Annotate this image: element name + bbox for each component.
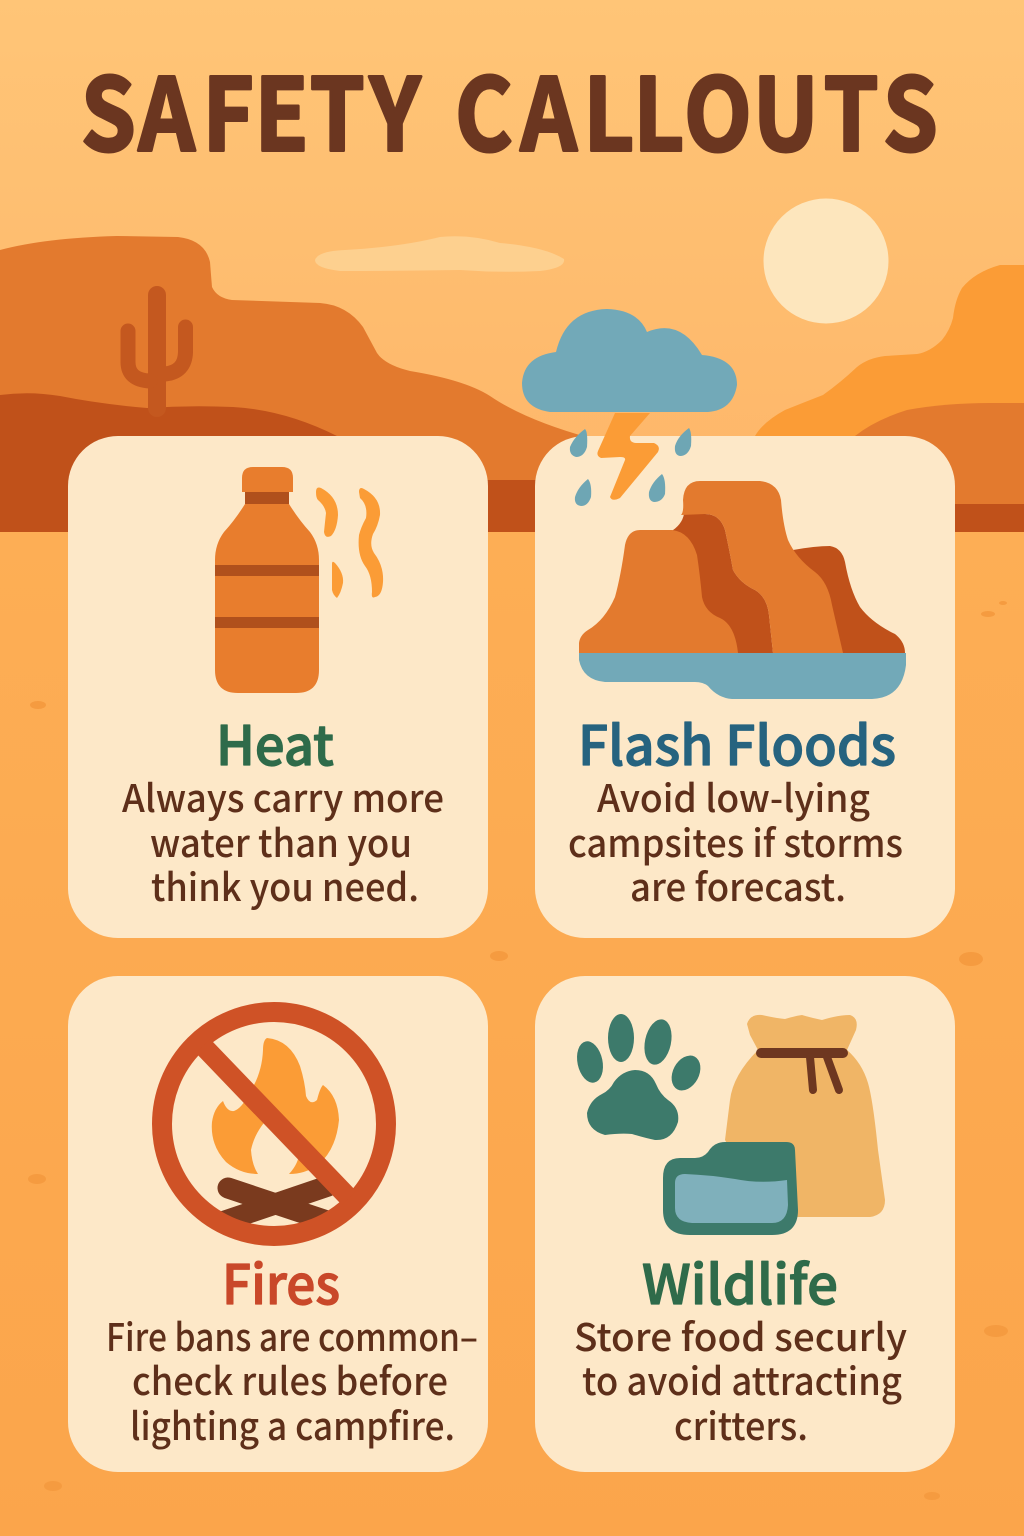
text: heat advice	[122, 768, 444, 912]
text: fires advice: lighting a campfire.	[130, 1396, 455, 1451]
icon: heat waves	[316, 488, 383, 598]
title: T	[310, 36, 365, 180]
title: F	[202, 36, 254, 180]
icon: water bottle	[215, 467, 319, 693]
icon: raindrops	[570, 428, 691, 506]
panel: flash floods	[522, 309, 955, 938]
text: wildlife advice: Store food securly	[574, 1307, 907, 1362]
icon: storm cloud	[522, 309, 737, 412]
heading: fires: Fires	[222, 1241, 340, 1320]
title: S	[81, 36, 136, 180]
title: L	[583, 36, 634, 180]
sky background	[0, 0, 1024, 540]
title: A	[138, 36, 196, 180]
text: heat advice: think you need.	[151, 857, 419, 912]
panel: fires	[68, 976, 488, 1472]
wispy cloud	[315, 236, 564, 272]
panel: heat	[68, 436, 488, 938]
icon: campfire flame	[212, 1038, 339, 1174]
heading: flash floods: Flash Floods	[578, 702, 896, 781]
right hills	[755, 265, 1024, 540]
text: flash floods advice: Avoid low-lying	[597, 768, 870, 823]
text: wildlife advice: critters.	[674, 1396, 808, 1451]
text: fires advice: Fire bans are common–	[106, 1307, 478, 1362]
title: O	[684, 36, 752, 180]
icon: lightning bolt	[597, 413, 659, 500]
title: Y	[369, 36, 422, 180]
desert ground	[0, 532, 1024, 1536]
text: wildlife advice	[574, 1307, 907, 1451]
title: U	[753, 36, 819, 180]
icon: canyon mesas and flood water	[579, 481, 906, 699]
left mesa hills	[0, 236, 600, 540]
ground pebbles	[28, 601, 1008, 1500]
icon: prohibition sign	[162, 1012, 386, 1236]
title: L	[633, 36, 684, 180]
text: flash floods advice: are forecast.	[630, 857, 846, 912]
sun	[764, 198, 888, 324]
icon: cactus	[128, 295, 186, 408]
panel: wildlife	[535, 976, 955, 1472]
heading: wildlife: Wildlife	[642, 1241, 838, 1320]
text: fires advice: check rules before	[132, 1351, 448, 1406]
icon: paw print	[573, 1014, 706, 1140]
icon: campfire logs	[222, 1186, 330, 1222]
heading: heat: Heat	[216, 702, 334, 781]
text: heat advice: water than you	[150, 813, 412, 868]
title: E	[254, 36, 309, 180]
text: flash floods advice: campsites if storms	[568, 813, 903, 868]
title: C	[455, 36, 513, 180]
text: heat advice: Always carry more	[122, 768, 444, 823]
title: S	[883, 36, 938, 180]
title: A	[520, 36, 578, 180]
icon: food sack	[725, 1015, 885, 1217]
text: flash floods advice	[568, 768, 903, 912]
title: T	[824, 36, 879, 180]
icon: food container	[663, 1142, 798, 1235]
text: fires advice	[106, 1307, 478, 1451]
text: wildlife advice: to avoid attracting	[582, 1351, 902, 1406]
